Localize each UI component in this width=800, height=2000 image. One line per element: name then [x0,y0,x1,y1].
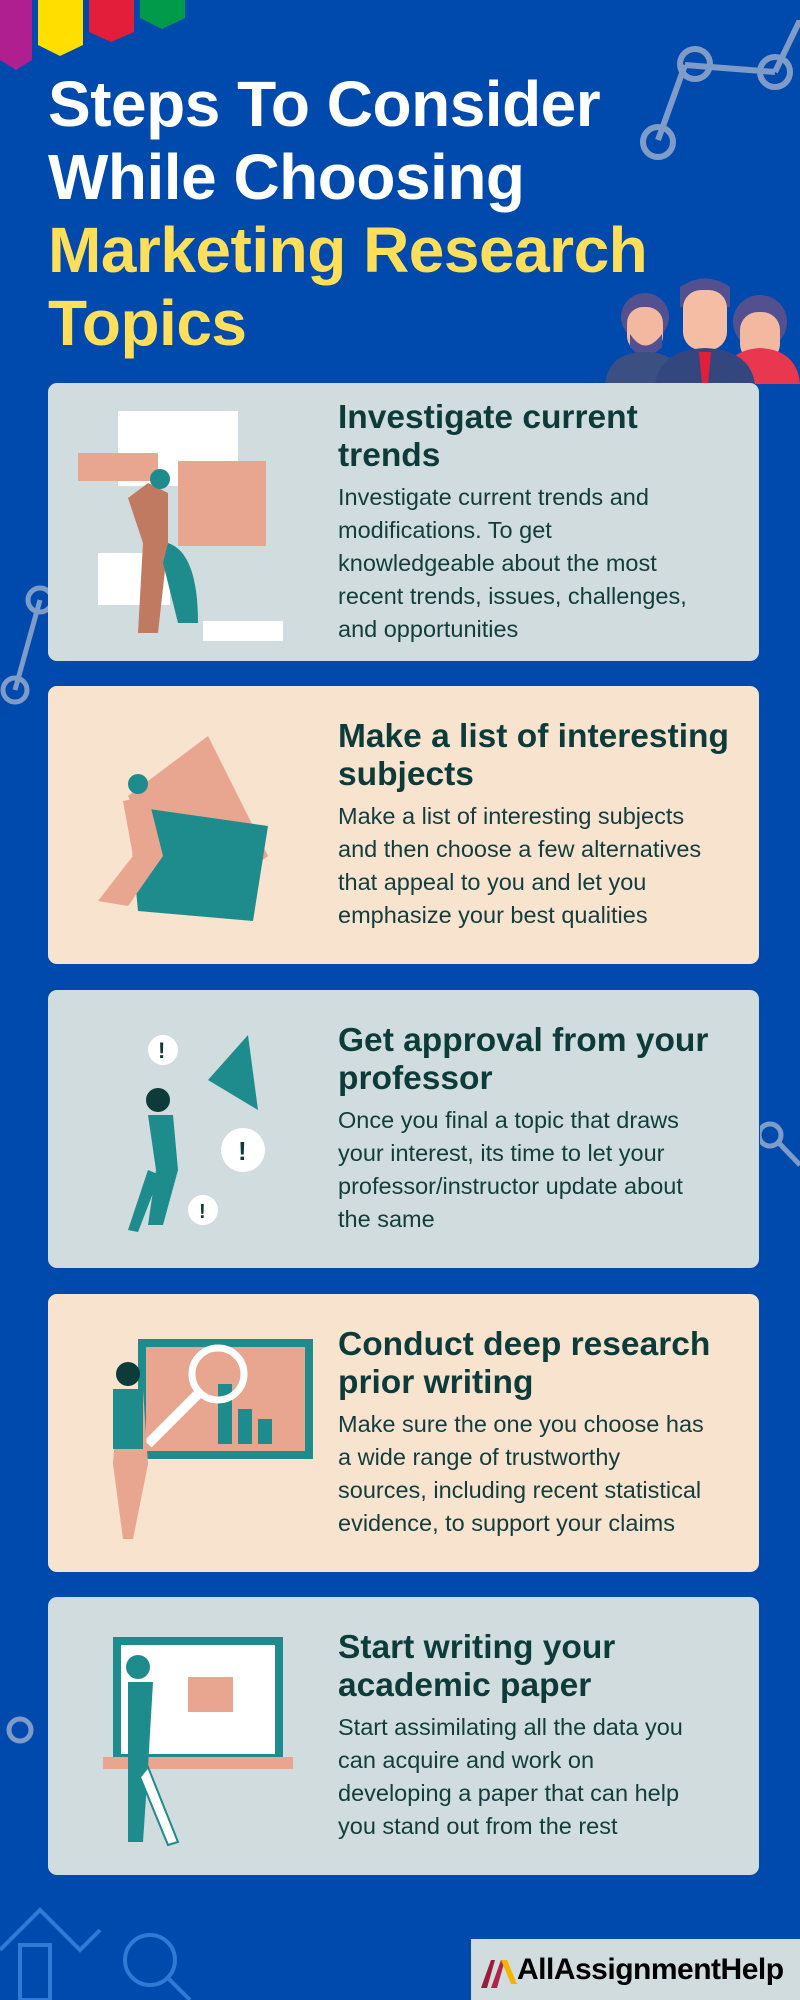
illustration: megaphone: ! [238,1136,247,1166]
text: step 1: knowledgeable about the most [338,550,657,576]
title: Marketing Research [48,214,647,286]
text: step 1 [338,398,687,642]
text: step 5: Start assimilating all the data you [338,1714,683,1740]
illustration: trends [78,411,283,641]
illustration: folder [98,736,268,921]
text: step 4: a wide range of trustworthy [338,1444,620,1470]
text: step 3: professor [338,1060,493,1097]
logo: AllAssignmentHelp [471,1939,800,2000]
title [48,68,647,359]
decorative bottom-left graph [0,1907,192,2000]
text: step 2: emphasize your best qualities [338,902,648,928]
text: step 2: and then choose a few alternatives [338,836,701,862]
text: step 4: Conduct deep research [338,1326,710,1363]
text: step 2: Make a list of interesting subjects [338,803,684,829]
text: step 3: professor/instructor update about [338,1173,683,1199]
text: step 5 [338,1629,683,1839]
text: step 2 [338,718,729,928]
illustration: research chart [113,1339,313,1539]
text: step 1: recent trends, issues, challenges, [338,582,687,608]
text: step 4 [338,1326,710,1536]
text: step 5: developing a paper that can help [338,1780,679,1806]
text: step 1: modifications. To get [338,516,552,542]
icon: logo mark [481,1960,517,1988]
illustration: megaphone [128,1035,265,1232]
decorative nodes right [760,1122,800,1167]
icon: network nodes top right [640,20,800,160]
text: step 2: subjects [338,756,474,793]
text: step 3: the same [338,1206,435,1232]
panel: step 1 [48,383,759,661]
text: step 2: that appeal to you and let you [338,869,646,895]
illustration: megaphone: ! [199,1201,206,1223]
panel: step 2 [48,686,759,964]
decorative flags [0,0,185,70]
panel: step 3 [48,990,759,1268]
text: step 1: trends [338,436,440,474]
text: step 4: prior writing [338,1364,533,1401]
illustration: writing [103,1637,293,1846]
title: Steps To Consider [48,68,600,140]
text: step 3 [338,1022,708,1232]
text: step 1: Investigate current [338,398,638,436]
panel: step 5 [48,1597,759,1875]
text: step 5: can acquire and work on [338,1747,594,1773]
text: step 3: your interest, its time to let your [338,1140,665,1166]
text: step 5: you stand out from the rest [338,1813,618,1839]
text: step 5: Start writing your [338,1629,615,1666]
text: step 1: Investigate current trends and [338,484,649,510]
title: Topics [48,287,246,359]
text: step 4: sources, including recent statistical [338,1477,701,1503]
text: step 3: Get approval from your [338,1022,708,1059]
text: step 4: evidence, to support your claims [338,1510,675,1536]
text: step 4: Make sure the one you choose has [338,1411,704,1437]
icon: people group [605,278,800,384]
illustration: megaphone: ! [158,1038,165,1063]
title: While Choosing [48,141,524,213]
text: step 5: academic paper [338,1667,591,1704]
decorative nodes left [0,586,48,704]
text: step 2: Make a list of interesting [338,718,729,755]
text: step 3: Once you final a topic that draws [338,1107,679,1133]
logo: AllAssignmentHelp: AllAssignmentHelp [517,1953,784,1986]
text: step 1: and opportunities [338,616,518,642]
panel: step 4 [48,1294,759,1572]
